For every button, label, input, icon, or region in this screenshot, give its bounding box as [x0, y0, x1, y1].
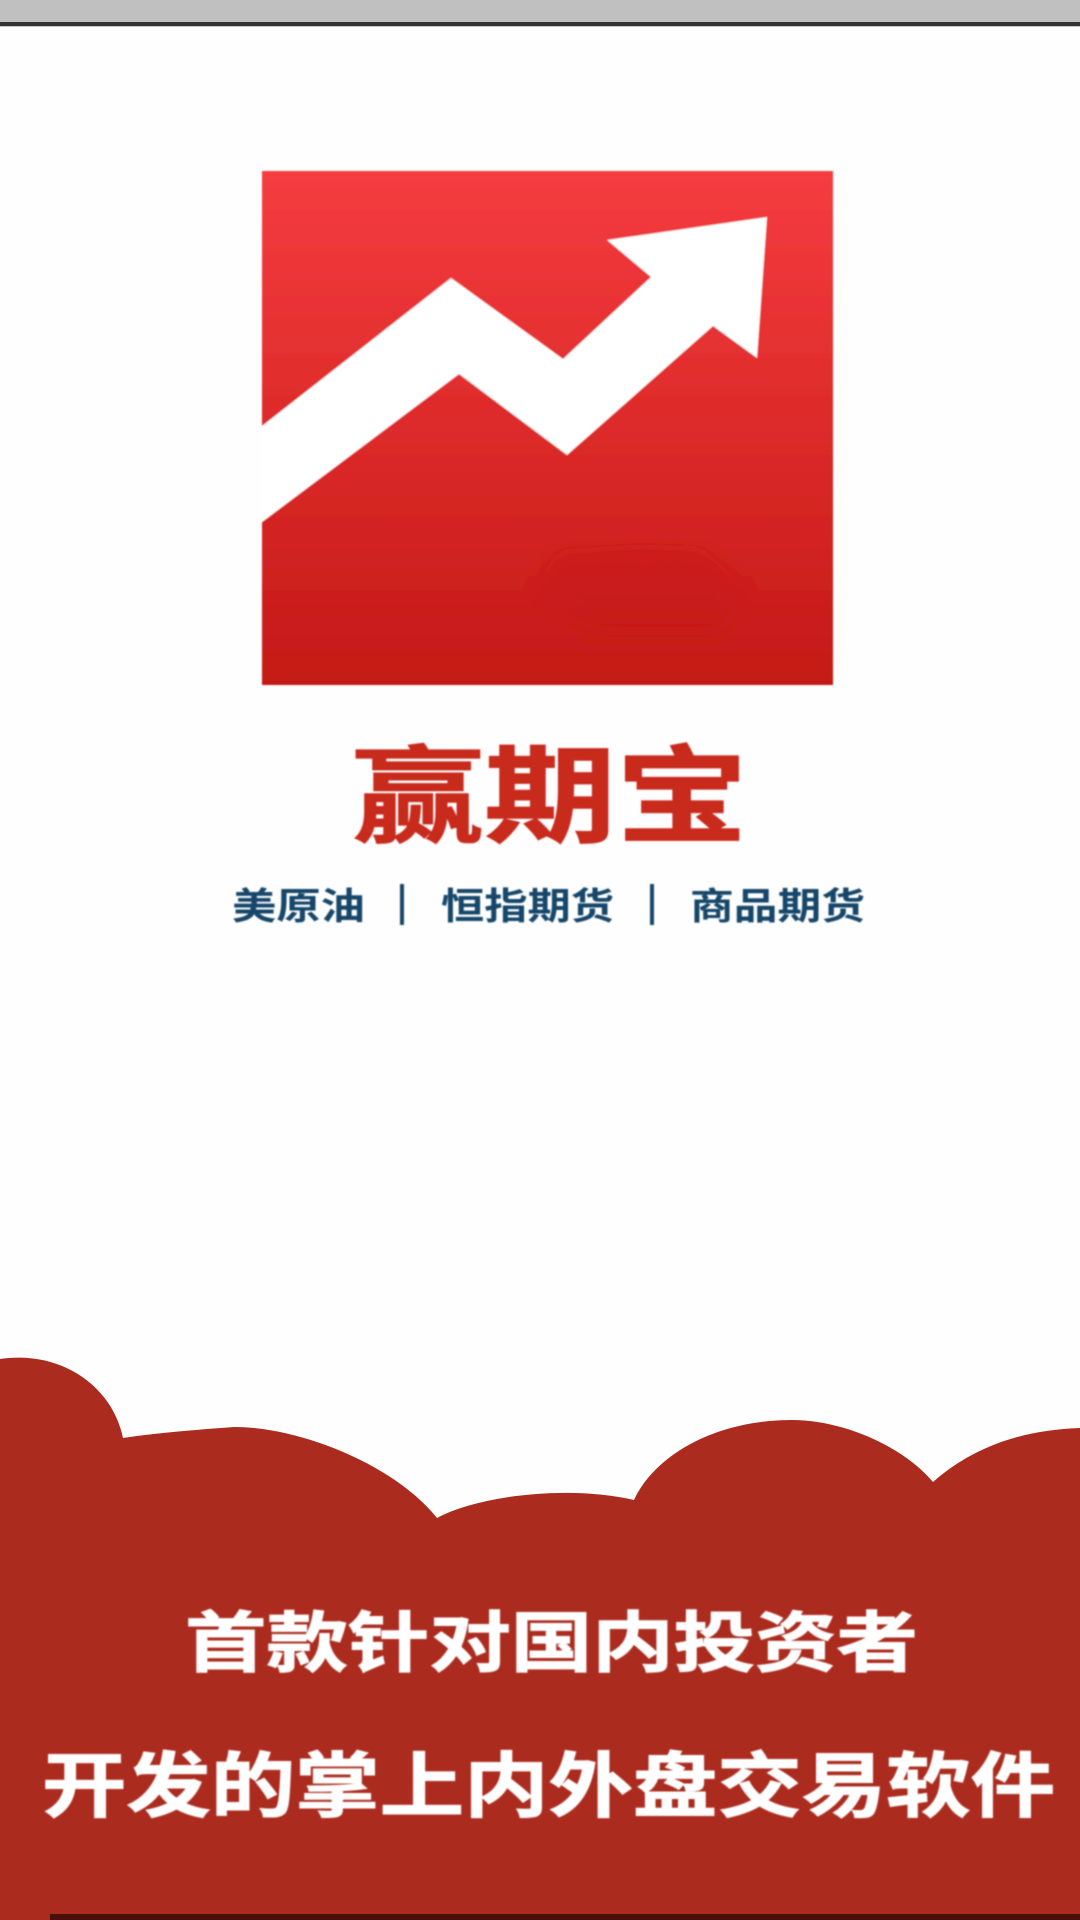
product categories line: 美原油: [232, 886, 365, 927]
tagline: 开发的掌上内外盘交易软件: [42, 1748, 1055, 1827]
tagline: 首款针对国内投资者: [185, 1606, 918, 1680]
bottom dark edge: [50, 1914, 1080, 1920]
logo: red square with rising arrow: [262, 171, 833, 685]
brand title: 赢期宝: [352, 739, 748, 857]
product categories line: [232, 884, 865, 927]
faint mountain shading: [535, 550, 745, 630]
product categories line: 商品期货: [690, 886, 865, 927]
tagline: [42, 1606, 1055, 1827]
product categories line: 恒指期货: [441, 886, 614, 927]
top status bar: [0, 0, 1080, 27]
icon: white zigzag arrow: [262, 217, 767, 522]
red cloud footer panel: [0, 1358, 1080, 1920]
